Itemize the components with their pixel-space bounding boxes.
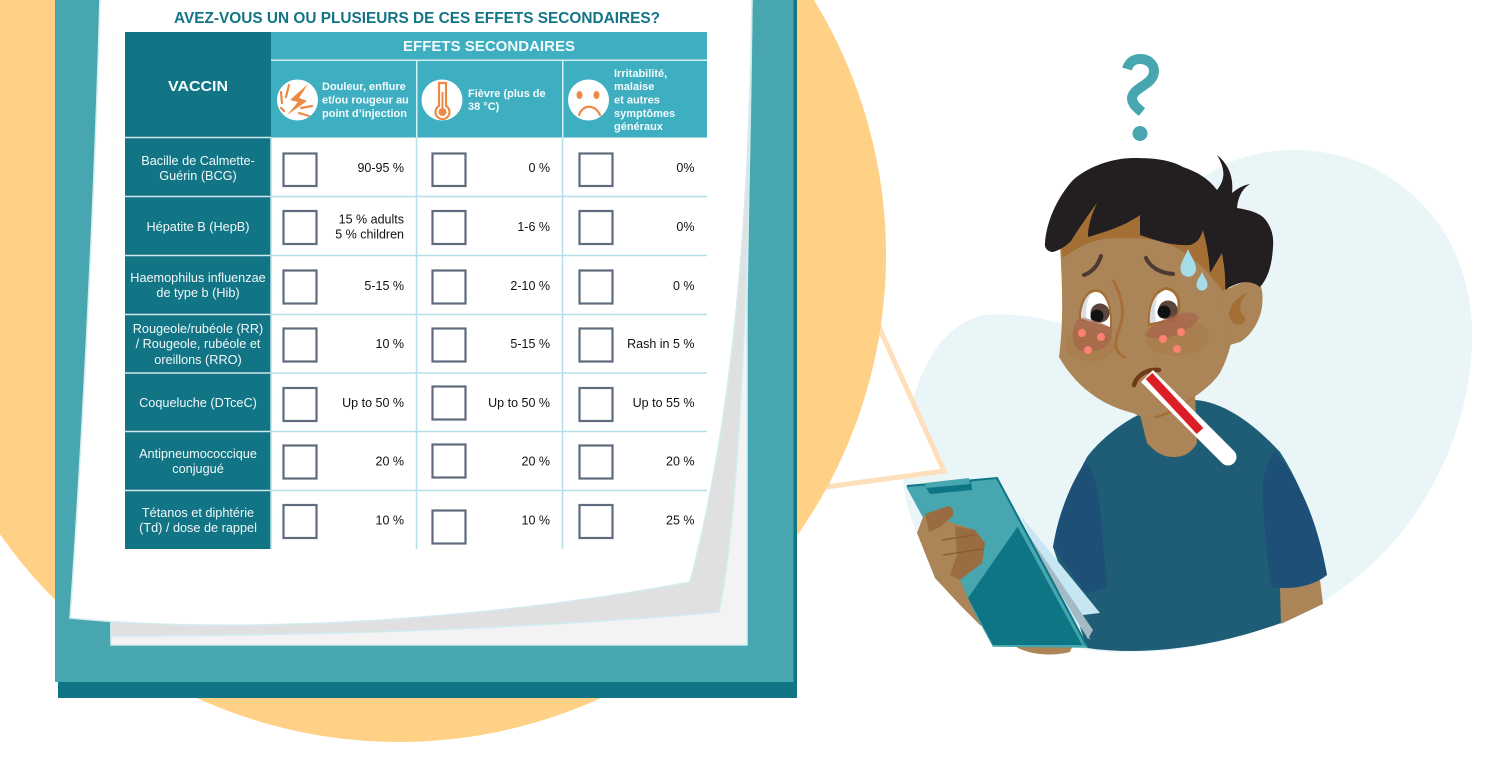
nose: [1113, 280, 1126, 358]
percentage values: Up to 55 %: [633, 396, 694, 410]
ear: [1222, 281, 1262, 345]
percentage values: Up to 50 %: [488, 396, 550, 410]
papers shadow: [1023, 527, 1093, 639]
vaccine name column: oreillons (RRO): [154, 353, 242, 367]
sweat drops: [1180, 249, 1208, 290]
header text: irritability: malaise: [614, 81, 654, 93]
neck: [1140, 393, 1197, 457]
clipboard papers: [1020, 515, 1100, 640]
ear inner shadow: [1229, 292, 1248, 325]
vaccine name column: Bacille de Calmette-: [141, 154, 255, 168]
icon: sad face: [568, 80, 609, 120]
percentage values: 0 %: [673, 279, 694, 293]
face: [1059, 210, 1234, 418]
vaccine column header: VACCIN: [168, 78, 228, 95]
left eye: [1079, 289, 1112, 328]
percentage values: 25 %: [666, 514, 694, 528]
forehead shadow: [1060, 195, 1230, 292]
clipboard back edge: [58, 0, 797, 698]
header text: pain: point d’injection: [322, 108, 407, 120]
vaccine side-effects table: [125, 32, 707, 549]
title: AVEZ-VOUS UN OU PLUSIEURS DE CES EFFETS SECONDAIRES?: [174, 10, 660, 27]
curled middle sheet: [111, 0, 752, 636]
right eye: [1148, 287, 1180, 326]
thermometer: [1147, 376, 1228, 457]
percentage values: 90-95 %: [357, 161, 404, 175]
icon: injection pain: [277, 80, 318, 120]
percentage values: 20 %: [376, 454, 404, 468]
percentage values: 15 % adults: [339, 212, 404, 226]
vaccine name column: Antipneumococcique: [139, 447, 257, 461]
neck shadow: [1140, 390, 1194, 418]
percentage values: 1-6 %: [517, 220, 550, 234]
orange circle: [0, 0, 886, 742]
mouth: [1134, 370, 1159, 385]
shirt: [1053, 400, 1327, 651]
right sleeve: [1263, 452, 1327, 588]
icon: thermometer: [422, 80, 462, 120]
vaccine name column: Coqueluche (DTceC): [139, 396, 257, 410]
percentage values: 0%: [676, 161, 694, 175]
clipboard board: [55, 0, 794, 682]
vaccine name column: Haemophilus influenzae: [130, 271, 266, 285]
checkboxes: [284, 154, 612, 544]
header text: fever: Fièvre (plus de: [468, 88, 546, 100]
header text: pain: Douleur, enflure: [322, 81, 406, 93]
percentage values: 0%: [676, 220, 694, 234]
vaccine name column: Tétanos et diphtérie: [142, 506, 254, 520]
side effects header band: [271, 32, 707, 138]
hand holding clipboard: [917, 506, 985, 625]
handheld clipboard: [907, 478, 1087, 647]
character: boy with thermometer: [907, 155, 1327, 655]
side effects header band: EFFETS SECONDAIRES: [403, 39, 575, 55]
front sheet: [70, 0, 752, 625]
percentage values: [335, 161, 694, 528]
percentage values: 10 %: [522, 514, 550, 528]
vaccine name column: / Rougeole, rubéole et: [136, 337, 261, 351]
header text: irritability: symptômes: [614, 108, 675, 120]
percentage values: Rash in 5 %: [627, 337, 694, 351]
percentage values: 20 %: [666, 454, 694, 468]
speech bubble pointer: [826, 325, 944, 487]
vaccine name column: conjugué: [172, 462, 224, 476]
left sleeve: [1053, 462, 1107, 593]
hand on clipboard back: [935, 578, 1075, 655]
percentage values: 5 % children: [335, 228, 404, 242]
percentage values: 5-15 %: [510, 337, 550, 351]
percentage values: 0 %: [528, 161, 550, 175]
back sheet: [111, 0, 752, 645]
percentage values: 2-10 %: [510, 279, 550, 293]
vaccine name column: (Td) / dose de rappel: [139, 521, 257, 535]
percentage values: 10 %: [376, 514, 404, 528]
vaccine name column: Rougeole/rubéole (RR): [133, 322, 263, 336]
left arm behind clipboard: [1080, 588, 1104, 620]
percentage values: 10 %: [376, 337, 404, 351]
header text: fever: 38 °C): [468, 101, 500, 113]
header text: irritability: Irritabilité,: [614, 68, 667, 80]
header text: pain: et/ou rougeur au: [322, 94, 409, 106]
percentage values: Up to 50 %: [342, 396, 404, 410]
header text: irritability: et autres: [614, 94, 660, 106]
vaccine name column: de type b (Hib): [156, 286, 240, 300]
rash on cheeks: [1065, 313, 1209, 361]
vaccine name column: [125, 138, 271, 549]
vaccine column header: [125, 32, 271, 138]
eyebrows: [1084, 256, 1173, 275]
right arm: [1275, 580, 1323, 624]
vaccine name column: Guérin (BCG): [159, 169, 237, 183]
vaccine name column: Hépatite B (HepB): [147, 220, 249, 234]
percentage values: 5-15 %: [364, 279, 404, 293]
hair: [1045, 155, 1273, 290]
icon: question mark: [1127, 59, 1154, 141]
header text: irritability: généraux: [614, 121, 664, 133]
clipboard: [55, 0, 797, 698]
percentage values: 20 %: [522, 454, 550, 468]
pale blue background blob: [903, 150, 1472, 652]
